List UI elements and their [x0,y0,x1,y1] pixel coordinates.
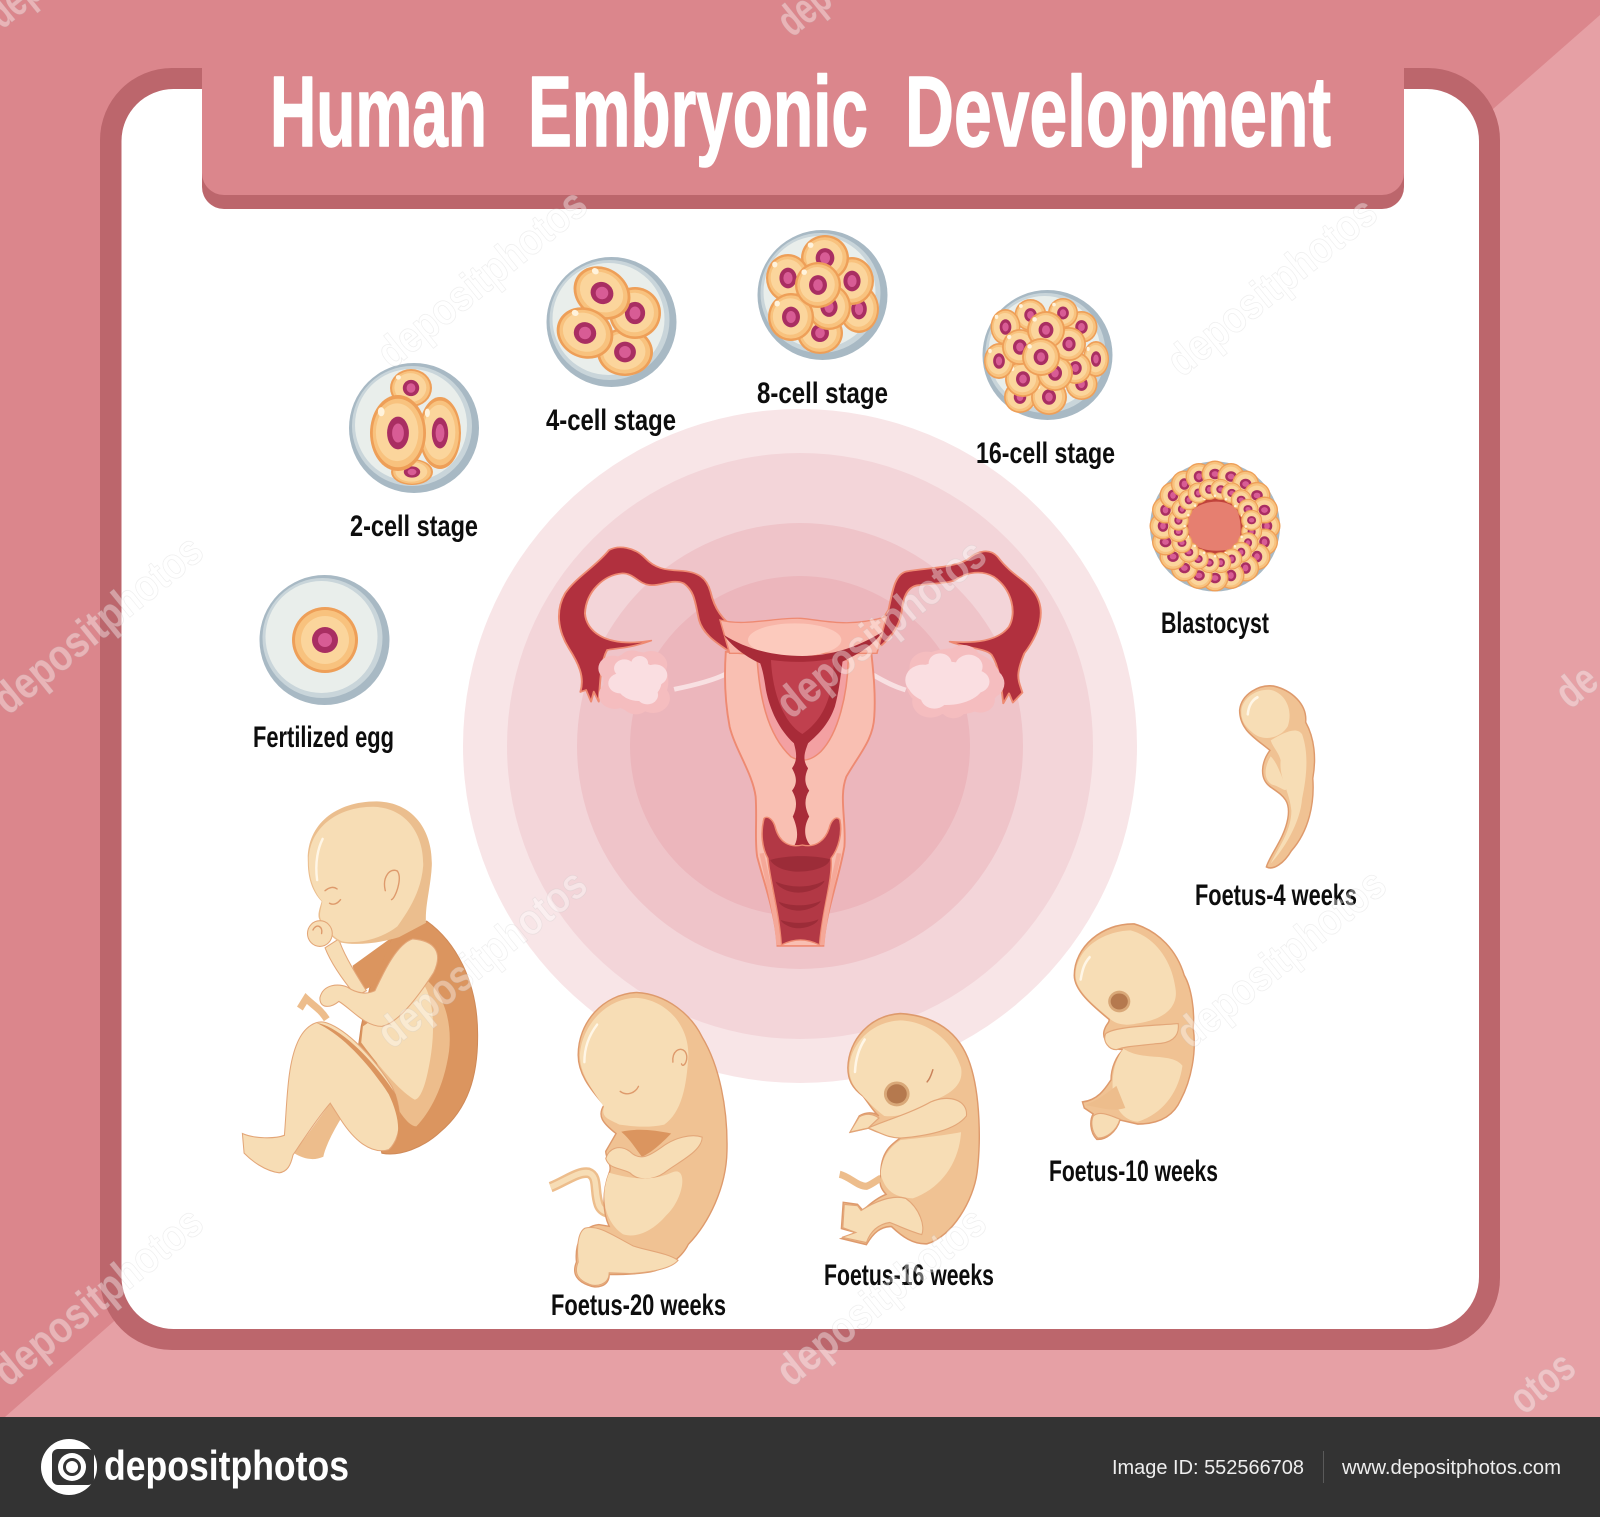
left fallopian tube [559,547,737,702]
stage: 8-cell stage [757,230,888,410]
stage: foetus 10 weeks [1049,924,1218,1188]
icon: blastocyst [1150,460,1280,592]
stage: fertilized egg [253,575,394,754]
late-stage foetus [242,801,478,1173]
icon: foetus 10 weeks [1074,924,1194,1139]
label: Foetus-16 weeks: Foetus-16 weeks [824,1259,994,1292]
uterine fundus [720,617,887,653]
label: 2-cell stage: 2-cell stage [350,510,478,543]
stage: 16-cell stage [976,290,1115,470]
title: Development [905,56,1331,168]
stage: blastocyst [1150,460,1280,640]
watermarks: depositphotos [367,859,596,1058]
label: Foetus-4 weeks: Foetus-4 weeks [1195,879,1357,912]
icon: fertilized egg [260,575,390,705]
uterine cavity and cervix [724,632,883,845]
icon: foetus 20 weeks [551,992,727,1287]
label: Blastocyst: Blastocyst [1161,607,1269,640]
label: Fertilized egg: Fertilized egg [253,721,394,754]
stage: 4-cell stage [546,255,676,437]
label: 8-cell stage: 8-cell stage [757,377,888,410]
logo wordmark: depositphotos [104,1442,349,1489]
icon: 16-cell egg [982,290,1112,420]
right fallopian tube [867,551,1041,703]
website: www.depositphotos.com [1341,1457,1561,1479]
icon: foetus 4 weeks [1240,686,1315,868]
icon: 2-cell egg [349,363,479,493]
label: 4-cell stage: 4-cell stage [546,404,676,437]
label: Foetus-10 weeks: Foetus-10 weeks [1049,1155,1218,1188]
title [270,56,1331,168]
stage: 2-cell stage [349,363,479,543]
title: Embryonic [528,56,868,168]
watermarks: otos [1499,1342,1585,1424]
title banner [202,0,1404,209]
stage: foetus 20 weeks [551,992,727,1322]
watermarks: depositphotos [1166,859,1395,1058]
vaginal canal [762,817,841,945]
right ovary [905,645,1004,718]
footer bar [0,1417,1600,1517]
watermarks: depositphotos [766,529,995,728]
label: Foetus-20 weeks: Foetus-20 weeks [551,1289,726,1322]
icon: 8-cell egg [758,230,888,360]
image id: Image ID: 552566708 [1112,1457,1304,1479]
panel: white framed card [100,68,1500,1350]
stage: foetus 16 weeks [824,1014,994,1292]
icon: 4-cell egg [546,255,676,387]
watermarks: depositphotos [766,1197,995,1396]
icon: foetus 16 weeks [840,1014,979,1245]
watermarks: depositphotos [1157,187,1386,386]
title: Human [270,56,487,168]
stage: foetus 4 weeks [1195,686,1357,912]
label: 16-cell stage: 16-cell stage [976,437,1115,470]
icon: camera logo [41,1439,97,1495]
concentric womb circles [463,409,1137,1083]
watermarks: depositphotos [367,179,596,378]
myometrium [757,660,848,760]
uterus anatomy [559,547,1041,946]
uterus body [725,652,875,946]
left ovary [598,650,670,714]
